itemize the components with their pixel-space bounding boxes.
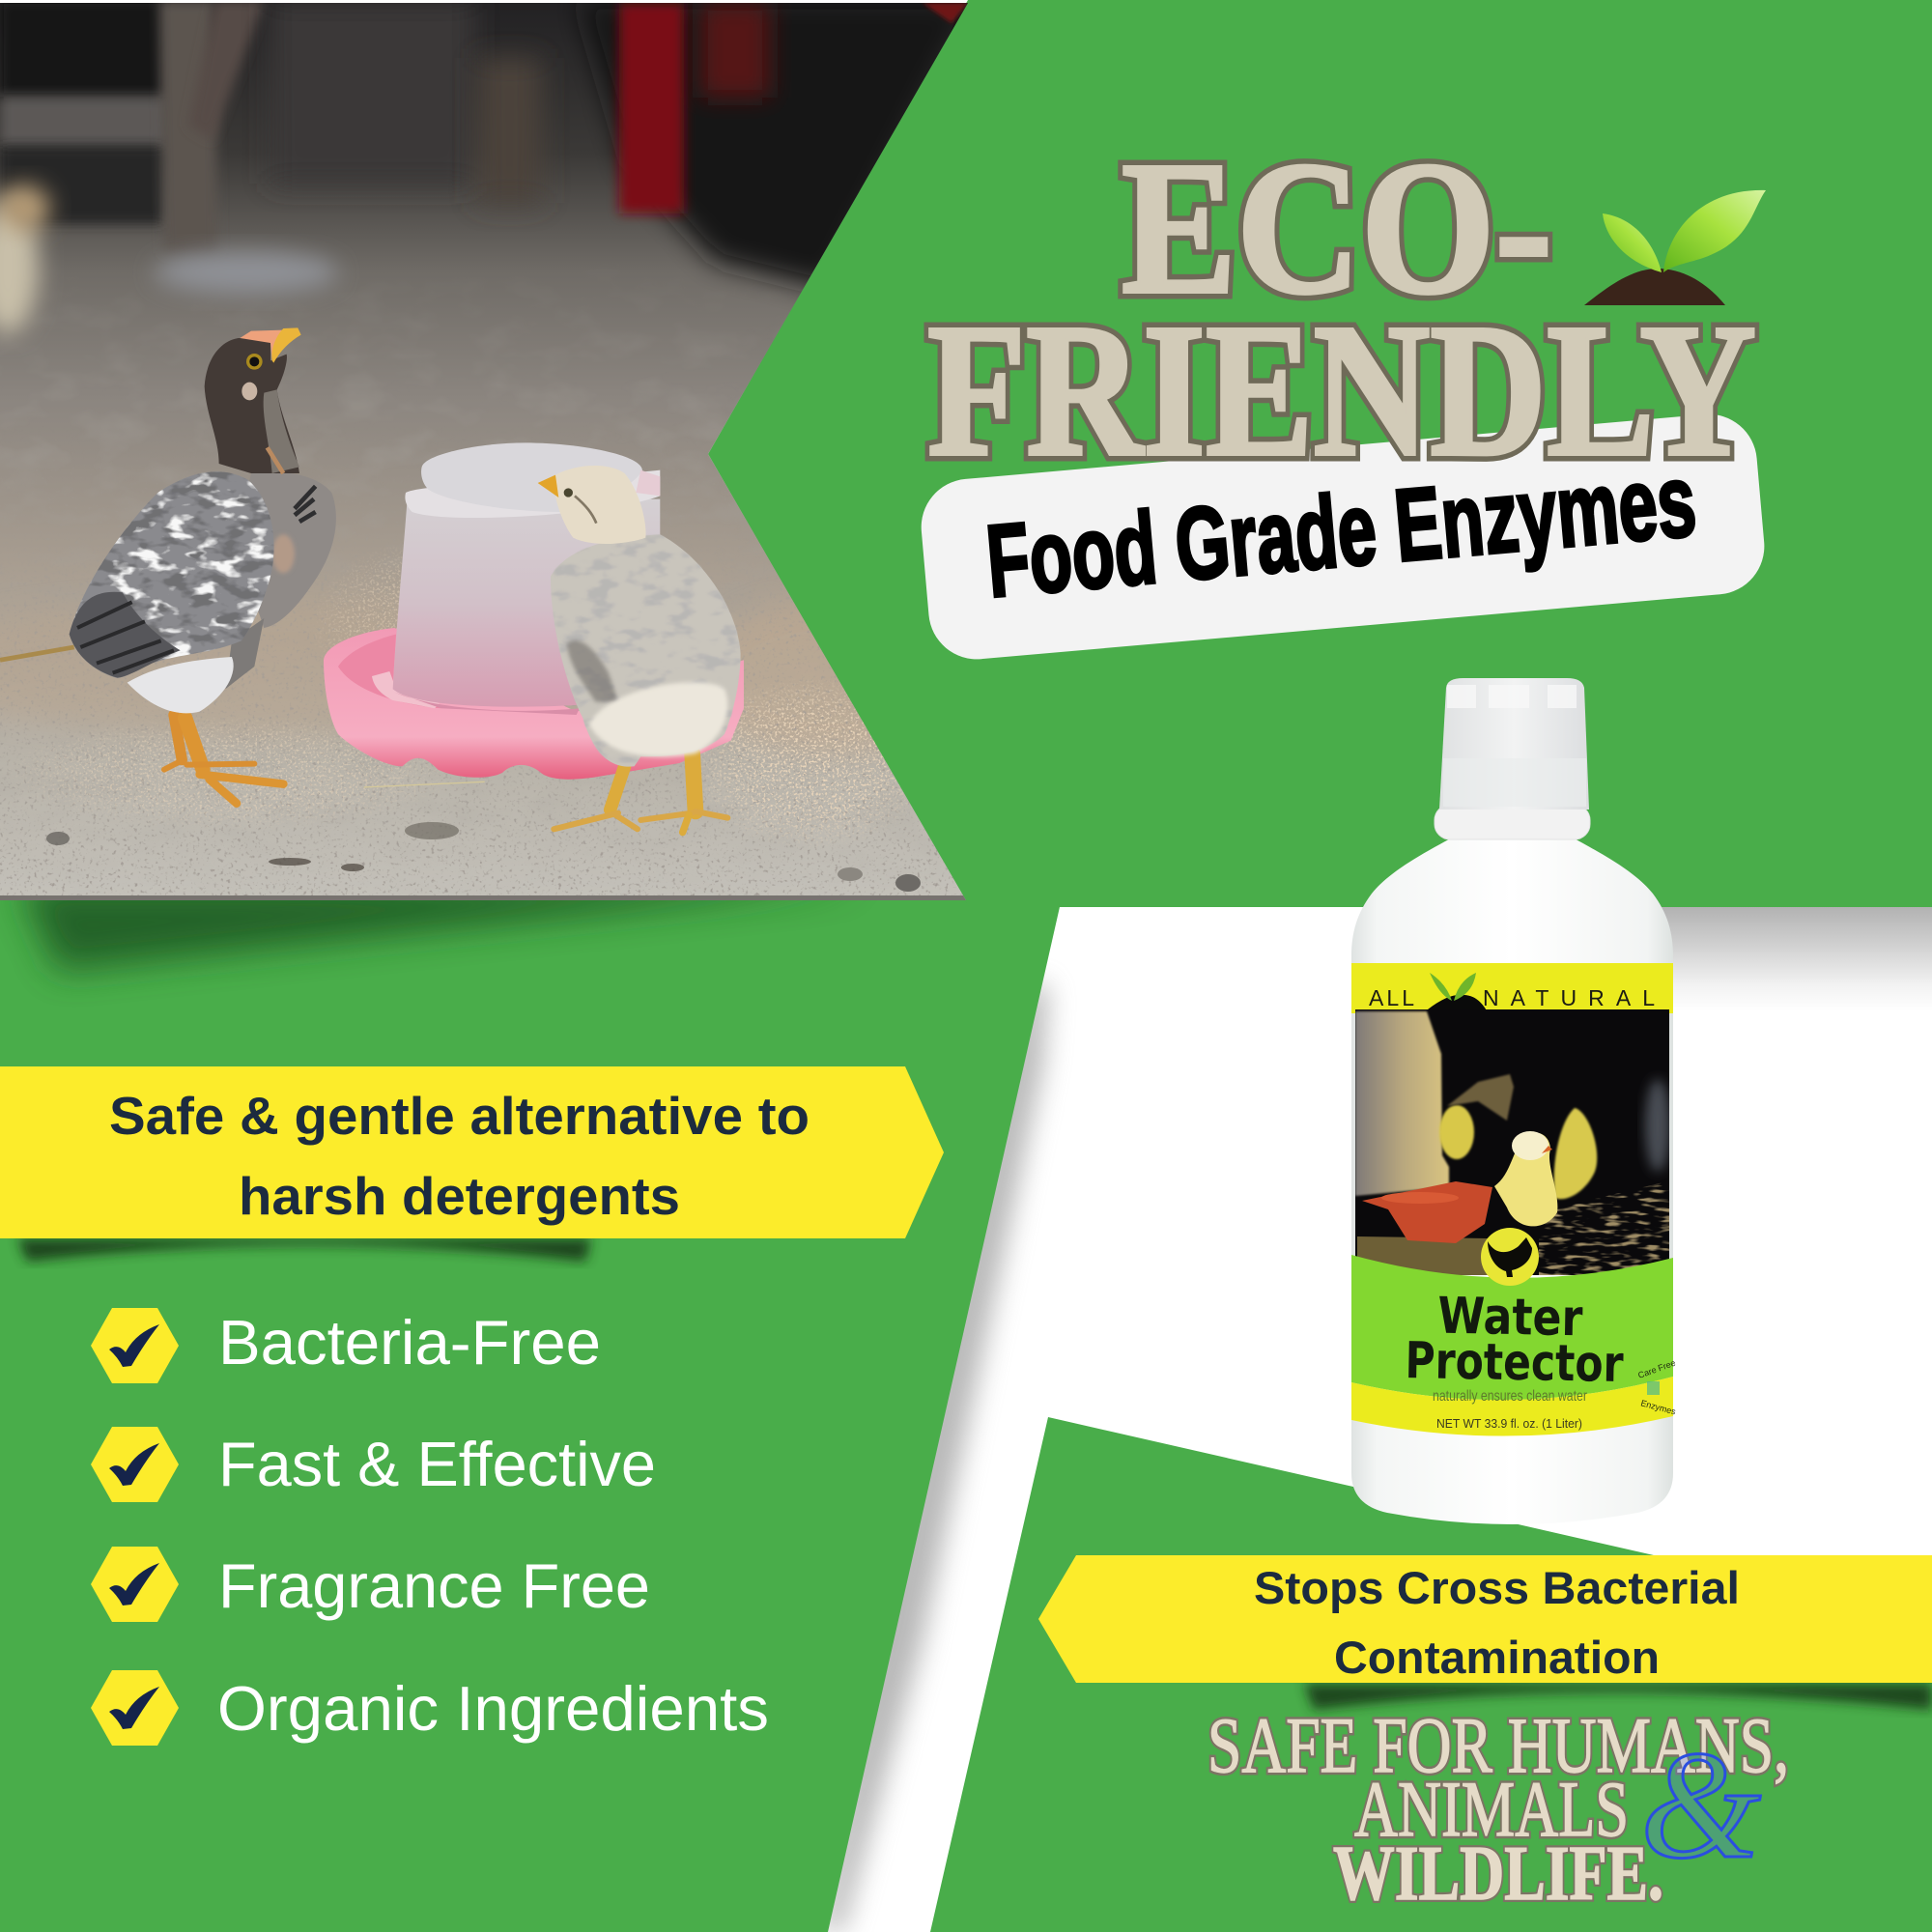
floor gravel texture bbox=[0, 553, 962, 895]
banner: safe and gentle: Safe & gentle alternative to bbox=[109, 1086, 810, 1146]
panel: lower right green bbox=[930, 1417, 1932, 1932]
pill: food grade enzymes bbox=[918, 411, 1769, 664]
icon: sprout bbox=[1584, 190, 1766, 305]
heading line: ECO-: ECO- bbox=[1122, 122, 1552, 333]
photo background and floor bbox=[0, 0, 976, 908]
label text: water protector: Protector bbox=[1405, 1332, 1624, 1394]
label photo: chicks at a feeder bbox=[1355, 1009, 1671, 1280]
heading line: ECO-: ECO- bbox=[1122, 122, 1552, 333]
banner: safe and gentle: harsh detergents bbox=[239, 1166, 680, 1226]
slogan line: animals: ANIMALS bbox=[1354, 1765, 1629, 1853]
bottle cap bbox=[1439, 678, 1589, 810]
heading line: FRIENDLY: FRIENDLY bbox=[927, 284, 1756, 496]
label text: water protector bbox=[1405, 1287, 1625, 1394]
item: fast and effective: Fast & Effective bbox=[218, 1429, 656, 1499]
chick: pale speckled bbox=[538, 466, 741, 833]
chick: dark speckled bbox=[0, 327, 336, 804]
item: fragrance free: Fragrance Free bbox=[218, 1550, 650, 1621]
slogan line: animals: ANIMALS bbox=[1354, 1765, 1629, 1853]
item: organic ingredients: Organic Ingredients bbox=[217, 1673, 769, 1744]
bottle collar bbox=[1435, 805, 1590, 839]
shadow: white panel right of the slanted edge bbox=[821, 985, 1048, 1932]
banner: stops cross bacterial contamination bbox=[1038, 1555, 1932, 1683]
ampersand: & bbox=[1640, 1719, 1761, 1890]
icon: hen badge bbox=[1481, 1228, 1539, 1286]
feature list bbox=[91, 1307, 769, 1746]
label band: all natural bbox=[1351, 963, 1673, 1013]
item: bacteria-free: Bacteria-Free bbox=[218, 1307, 601, 1378]
panel: top right green chevron bbox=[708, 0, 1932, 907]
label logo: care free enzymes: Enzymes bbox=[1639, 1398, 1677, 1417]
slogan: safe for humans, animals and wildlife bbox=[1208, 1701, 1789, 1917]
label text: net weight: NET WT 33.9 fl. oz. (1 Liter) bbox=[1436, 1416, 1582, 1431]
banner: stops cross bacterial contamination: Contamination bbox=[1334, 1632, 1660, 1683]
label text: naturally ensures clean water: naturally ensures clean water bbox=[1433, 1388, 1588, 1405]
banner shadow: bottom right bbox=[1304, 1684, 1932, 1710]
bottom photo edge bbox=[0, 895, 976, 900]
slogan line: wildlife: WILDLIFE. bbox=[1333, 1830, 1663, 1917]
heading line: FRIENDLY: FRIENDLY bbox=[927, 284, 1756, 496]
banner shadow: top left bbox=[17, 1238, 591, 1262]
label band: all natural: ALL bbox=[1369, 985, 1414, 1010]
slogan line: wildlife: WILDLIFE. bbox=[1333, 1830, 1663, 1917]
shadow beneath photo bbox=[19, 884, 869, 971]
photo: chicks at a pink drinker bbox=[0, 0, 976, 908]
bottle: water protector bbox=[1351, 678, 1677, 1524]
shadow under top green panel bbox=[1565, 907, 1932, 1011]
label logo: care free enzymes: Care Free bbox=[1636, 1358, 1677, 1380]
banner: safe and gentle bbox=[0, 1066, 944, 1238]
label text: water protector: Water bbox=[1437, 1288, 1583, 1348]
banner: stops cross bacterial contamination: Stops Cross Bacterial bbox=[1254, 1562, 1740, 1613]
label logo: care free enzymes bbox=[1636, 1358, 1677, 1417]
bottle body bbox=[1351, 837, 1673, 1524]
label band: lower yellow bbox=[1351, 1377, 1673, 1436]
label band: green product panel bbox=[1351, 1255, 1673, 1400]
drinker bbox=[324, 442, 744, 787]
item: bacteria-free bbox=[91, 1307, 601, 1383]
panel: lower left green bbox=[0, 898, 1062, 1932]
label band: all natural: NATURAL bbox=[1483, 985, 1655, 1010]
title: eco-friendly bbox=[927, 122, 1756, 496]
